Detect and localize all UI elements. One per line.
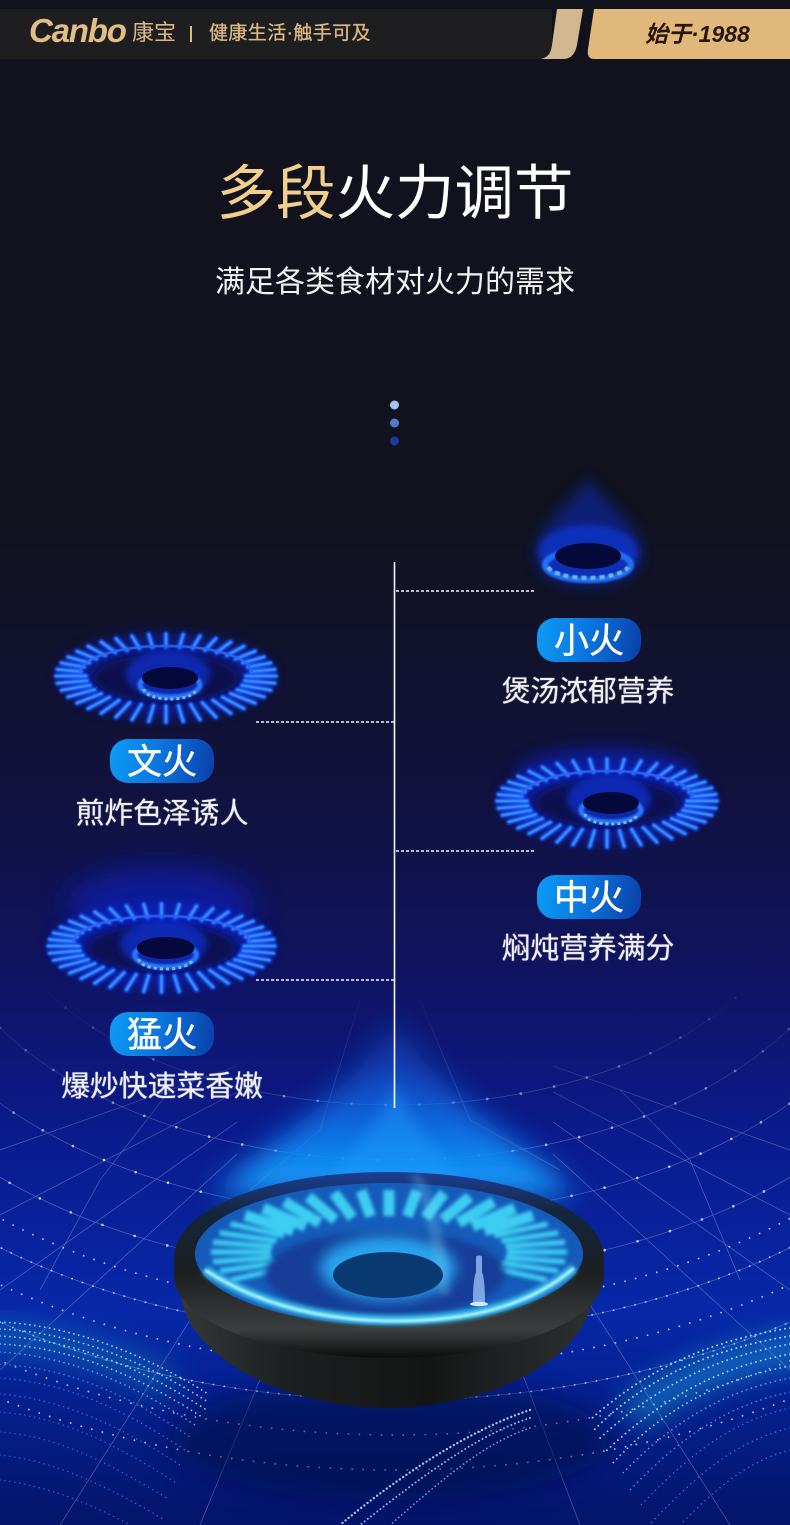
- label: strong flame: 猛火: [127, 1016, 197, 1055]
- dotted light wave: left: [0, 1322, 210, 1525]
- burner: [174, 1172, 604, 1408]
- rising flame wisps: [410, 1175, 450, 1295]
- subtitle: 满足各类食材对火力的需求: [215, 266, 575, 299]
- since 1988: 始于·1988: [645, 21, 750, 47]
- label: strong flame: [110, 1012, 214, 1056]
- title: 多段火力调节: [216, 160, 574, 227]
- description: strong flame: 爆炒快速菜香嫩: [61, 1071, 263, 1103]
- flame: gentle: [56, 634, 276, 722]
- brand chinese name: 康宝: [132, 20, 176, 45]
- label: medium flame: 中火: [554, 879, 624, 918]
- dashed connectors: [256, 591, 534, 980]
- central vertical line: [394, 562, 396, 1108]
- burner glass bowl: [195, 1183, 583, 1325]
- burner rim: [174, 1172, 604, 1358]
- burner cap: [333, 1252, 443, 1298]
- flame: medium: [497, 746, 717, 847]
- inner basin: [265, 1231, 505, 1317]
- bright lower glow: [205, 1268, 574, 1321]
- centre flame halo: [320, 1236, 456, 1300]
- glow band: right: [630, 1345, 790, 1415]
- label: medium flame: [537, 875, 641, 919]
- flame petals: [211, 1190, 567, 1280]
- label: small flame: 小火: [554, 622, 624, 661]
- description: medium flame: 焖炖营养满分: [502, 933, 674, 965]
- glow band: left: [0, 1335, 170, 1385]
- description: gentle flame: 煎炸色泽诱人: [76, 798, 248, 830]
- label: gentle flame: [110, 739, 214, 783]
- flame: strong: [48, 867, 275, 992]
- tan founding tab: [588, 9, 790, 59]
- flame: small: [536, 478, 642, 586]
- label: small flame: [537, 618, 641, 662]
- indicator dots: [390, 400, 399, 446]
- flame column above burner: [215, 1010, 575, 1195]
- top header bar: [0, 9, 790, 59]
- dotted light wave: right: [340, 1328, 790, 1525]
- label: gentle flame: 文火: [127, 743, 197, 782]
- separator: [190, 26, 192, 42]
- burner lower body: [180, 1290, 594, 1408]
- description: small flame: 煲汤浓郁营养: [502, 676, 674, 708]
- background network mesh: [0, 996, 790, 1525]
- header dark strip: [0, 9, 552, 59]
- ignition pin: [473, 1256, 485, 1303]
- tan slanted sliver: [540, 9, 583, 59]
- shadow under burner: [170, 1380, 610, 1500]
- brand logo: Canbo: [29, 12, 126, 49]
- slogan: 健康生活·触手可及: [209, 23, 371, 44]
